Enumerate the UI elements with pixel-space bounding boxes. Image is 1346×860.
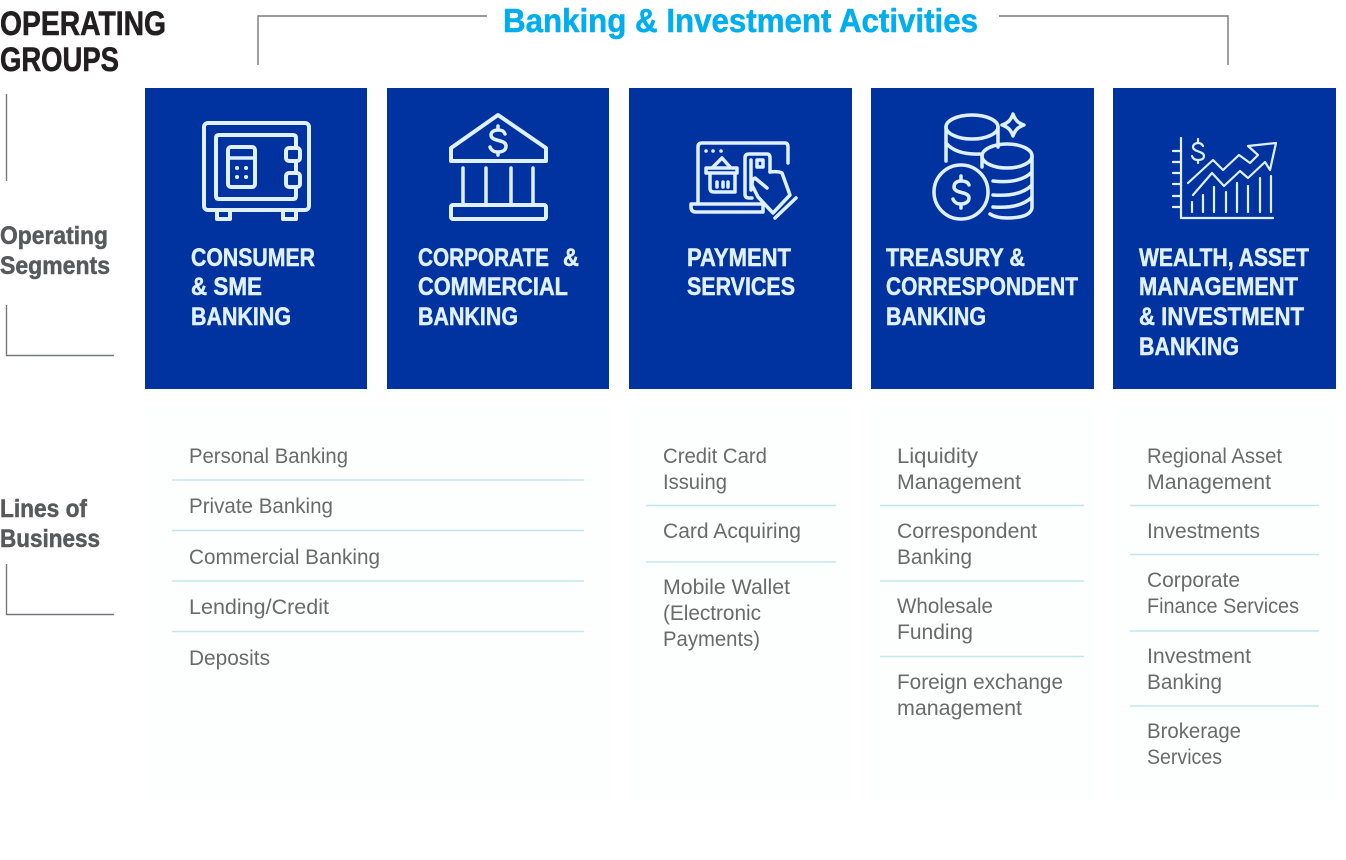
- segment name: COMMERCIAL: [418, 273, 568, 301]
- item: Banking: [897, 546, 972, 569]
- item: Wholesale: [897, 595, 993, 618]
- row label: operating segments: Segments: [0, 252, 110, 280]
- panel: treasury and correspondent banking: [871, 88, 1094, 389]
- panel: consumer and SME banking: [145, 88, 367, 389]
- segment name: & SME: [191, 273, 262, 301]
- item: Credit Card: [663, 445, 767, 468]
- item: Investment: [1147, 645, 1251, 668]
- item: Issuing: [663, 471, 727, 494]
- panel: payment services: [629, 88, 852, 389]
- item: Services: [1147, 746, 1222, 769]
- item: [1147, 445, 1282, 494]
- item: Corporate: [1147, 569, 1240, 592]
- item: Correspondent: [897, 520, 1037, 543]
- item: [897, 595, 993, 644]
- title: operating groups: GROUPS: [0, 41, 119, 79]
- item: [897, 445, 1021, 494]
- item: Banking: [1147, 671, 1222, 694]
- item: Management: [1147, 471, 1271, 494]
- panel: corporate and commercial banking: [387, 88, 609, 389]
- item: Regional Asset: [1147, 445, 1282, 468]
- item: Investments: [1147, 520, 1260, 543]
- segment name: & INVESTMENT: [1139, 303, 1304, 331]
- item: [897, 671, 1063, 720]
- segment name: CORRESPONDENT: [886, 273, 1078, 301]
- item: Card Acquiring: [663, 520, 801, 543]
- item: Payments): [663, 628, 760, 651]
- item: (Electronic: [663, 602, 761, 625]
- item: [663, 576, 790, 651]
- item: Brokerage: [1147, 720, 1241, 743]
- segment name: CORPORATE: [418, 244, 549, 272]
- segment name: SERVICES: [687, 273, 795, 301]
- item: Management: [897, 471, 1021, 494]
- item: Foreign exchange: [897, 671, 1063, 694]
- icon: coin stacks: [934, 114, 1032, 219]
- list: treasury lines of business: [871, 406, 1094, 800]
- row label: operating segments: [0, 94, 114, 356]
- segment name: BANKING: [418, 303, 518, 331]
- icon: rising chart: [1173, 138, 1276, 218]
- segment name: [191, 244, 315, 331]
- segment name: BANKING: [886, 303, 986, 331]
- item: Finance Services: [1147, 595, 1299, 618]
- heading: banking and investment activities: Banking & Investment Activities: [503, 2, 978, 39]
- item: Commercial Banking: [189, 546, 380, 569]
- segment name: [687, 244, 795, 301]
- segment name: MANAGEMENT: [1139, 273, 1298, 301]
- segment name: [1139, 244, 1309, 361]
- row label: lines of business: Lines of: [0, 495, 88, 523]
- segment name: BANKING: [191, 303, 291, 331]
- item: [1147, 569, 1299, 618]
- panel: wealth, asset management and investment banking: [1113, 88, 1336, 389]
- segment name: TREASURY &: [886, 244, 1025, 272]
- list: consumer and corporate lines of business: [145, 406, 609, 800]
- list: wealth lines of business: [1113, 406, 1336, 800]
- segment name: [886, 244, 1078, 331]
- item: Liquidity: [897, 445, 979, 468]
- icon: bank building: [451, 115, 546, 219]
- segment name: WEALTH, ASSET: [1139, 244, 1309, 272]
- segment name: &: [563, 244, 579, 272]
- item: [1147, 720, 1241, 769]
- row label: lines of business: [0, 495, 114, 614]
- item: [663, 445, 767, 494]
- icon: safe: [204, 123, 309, 219]
- item: Personal Banking: [189, 445, 348, 468]
- title: operating groups: [0, 5, 166, 79]
- segment name: CONSUMER: [191, 244, 315, 272]
- item: [897, 520, 1037, 569]
- icon: laptop with basket and card: [691, 143, 796, 218]
- list: payment lines of business: [629, 406, 852, 800]
- segment name: BANKING: [1139, 333, 1239, 361]
- item: [1147, 645, 1251, 694]
- segment name: PAYMENT: [687, 244, 791, 272]
- row label: lines of business: Business: [0, 525, 100, 553]
- item: Private Banking: [189, 495, 333, 518]
- item: Lending/Credit: [189, 596, 329, 619]
- segment name: [418, 244, 579, 331]
- item: Funding: [897, 621, 973, 644]
- item: Mobile Wallet: [663, 576, 790, 599]
- title: operating groups: OPERATING: [0, 5, 166, 43]
- bracket: banking and investment activities: [258, 16, 1228, 65]
- item: Deposits: [189, 647, 270, 670]
- item: management: [897, 697, 1022, 720]
- row label: operating segments: Operating: [0, 222, 108, 250]
